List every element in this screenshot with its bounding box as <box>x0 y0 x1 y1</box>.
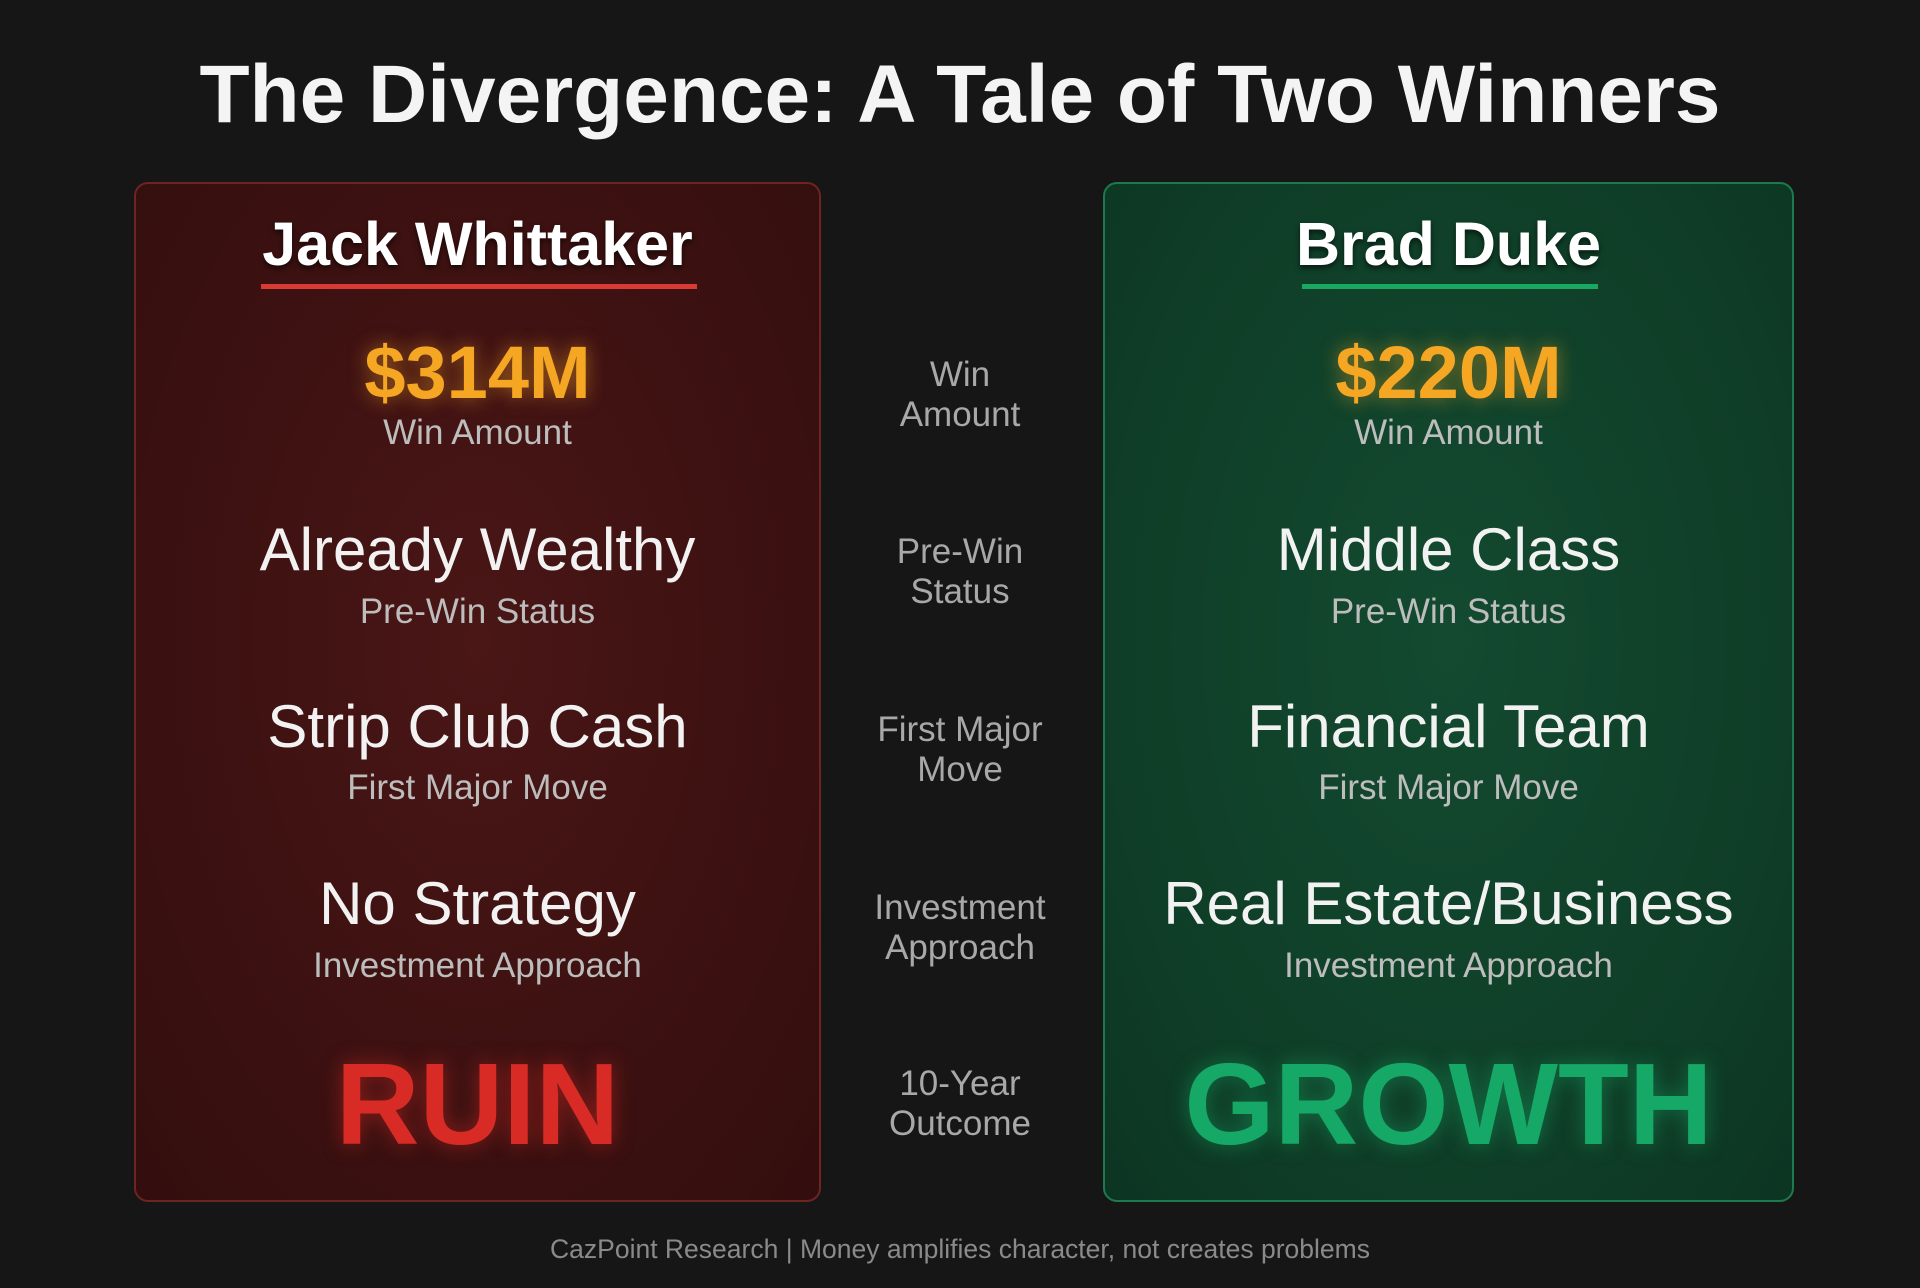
investment approach value: Real Estate/Business <box>1163 870 1734 937</box>
middle label: 10-year outcome: Outcome <box>889 1104 1031 1143</box>
win amount value: $220M <box>1335 331 1562 414</box>
footer: CazPoint Research | Money amplifies character, not creates problems <box>550 1234 1370 1264</box>
first major move value: Financial Team <box>1247 693 1650 760</box>
middle label: pre-win status: Status <box>910 572 1010 611</box>
win amount value: $314M <box>364 331 591 414</box>
panel: Brad Duke <box>1103 182 1794 1202</box>
label first major move: First Major Move <box>347 768 608 807</box>
middle label: investment approach: Investment <box>874 888 1046 927</box>
middle label: win amount: Amount <box>900 395 1020 434</box>
middle label: first major move <box>877 710 1043 789</box>
outcome GROWTH: GROWTH <box>1184 1039 1713 1169</box>
middle label: pre-win status: Pre-Win <box>897 532 1023 571</box>
heading: Jack Whittaker: Jack Whittaker <box>262 210 693 278</box>
label pre-win status: Pre-Win Status <box>1331 592 1566 631</box>
middle label: investment approach: Approach <box>885 928 1035 967</box>
middle label: investment approach <box>874 888 1046 967</box>
pre-win status value: Already Wealthy <box>260 516 695 583</box>
outcome RUIN: RUIN <box>336 1039 619 1169</box>
middle label: win amount: Win <box>930 355 990 394</box>
middle label: first major move: Move <box>917 750 1003 789</box>
label pre-win status: Pre-Win Status <box>360 592 595 631</box>
first major move value: Strip Club Cash <box>267 693 688 760</box>
pre-win status value: Middle Class <box>1277 516 1620 583</box>
panel: Jack Whittaker <box>134 182 821 1202</box>
underline green <box>1302 284 1598 289</box>
heading: Brad Duke: Brad Duke <box>1296 210 1601 278</box>
label first major move: First Major Move <box>1318 768 1579 807</box>
middle label: pre-win status <box>897 532 1023 611</box>
middle label: win amount <box>900 355 1020 434</box>
investment approach value: No Strategy <box>319 870 636 937</box>
title: The Divergence: A Tale of Two Winners <box>199 49 1721 140</box>
middle label: 10-year outcome: 10-Year <box>899 1064 1021 1103</box>
middle label: first major move: First Major <box>877 710 1043 749</box>
label win amount: Win Amount <box>1354 413 1543 452</box>
label investment approach: Investment Approach <box>313 946 642 985</box>
label investment approach: Investment Approach <box>1284 946 1613 985</box>
underline red <box>261 284 697 289</box>
label win amount: Win Amount <box>383 413 572 452</box>
middle label: 10-year outcome <box>889 1064 1031 1143</box>
